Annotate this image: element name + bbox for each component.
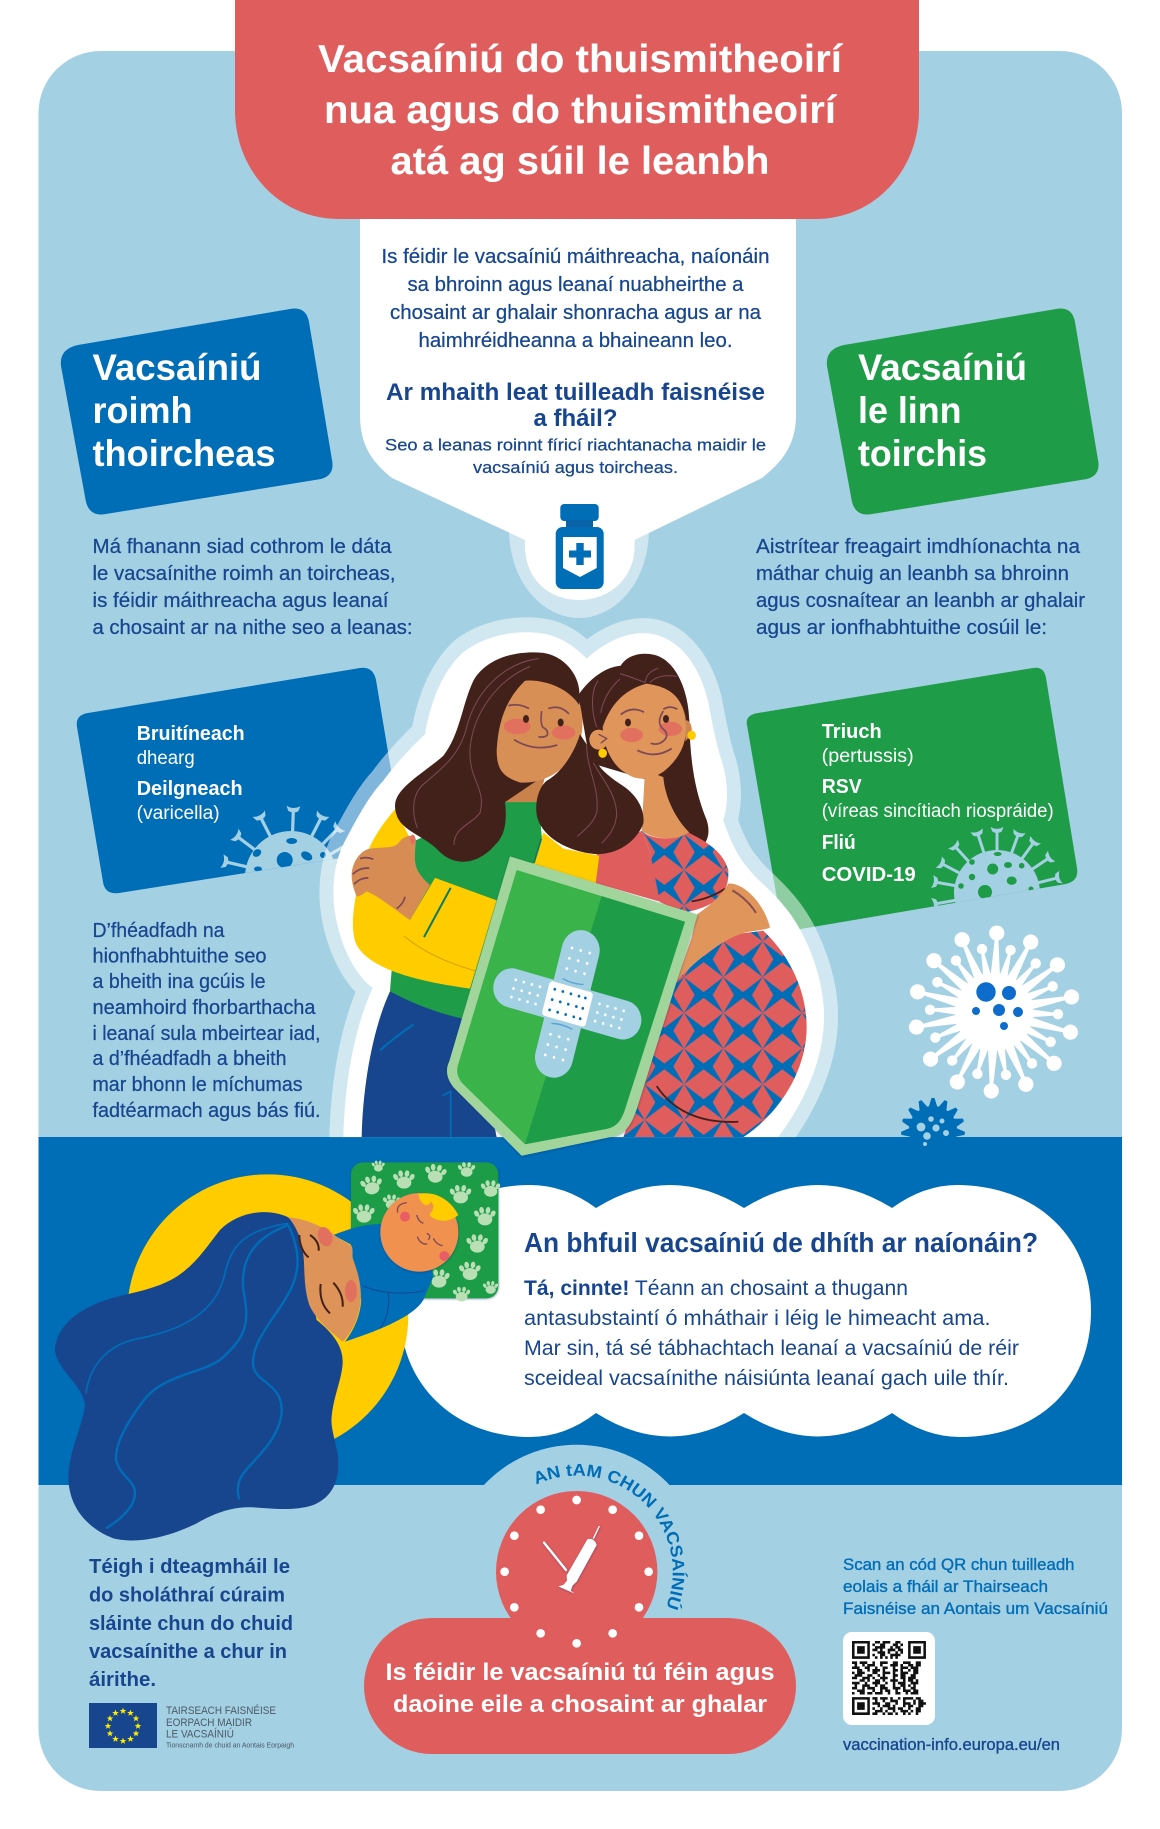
question subtext: Seo a leanas roinnt fíricí riachtanacha maidir le xyxy=(385,436,766,454)
illustration: mother with baby xyxy=(55,1160,501,1540)
question heading: Ar mhaith leat tuilleadh faisnéise xyxy=(386,379,765,406)
figure halo xyxy=(333,632,824,1137)
text: contact healthcare provider: sláinte chun do chuid xyxy=(89,1613,293,1635)
intro paragraph: Is féidir le vacsaíniú máithreacha, naíonáin xyxy=(382,245,770,268)
disease list xyxy=(822,720,1054,886)
shield with plaster xyxy=(447,856,698,1156)
disease list: RSV xyxy=(822,775,862,798)
baby pillow xyxy=(351,1162,498,1298)
clock hands: syringe xyxy=(544,1526,599,1594)
text: during pregnancy intro: máthar chuig an leanbh sa bhroinn xyxy=(756,563,1069,585)
icon: virus xyxy=(220,806,346,873)
right woman: back hair xyxy=(578,654,708,843)
hair strands xyxy=(86,1223,298,1528)
text: contact healthcare provider: áirithe. xyxy=(89,1669,156,1691)
heading: during pregnancy: le linn xyxy=(858,390,962,431)
text: birth defects warning xyxy=(92,920,320,1122)
text: scan QR prompt: Faisnéise an Aontais um Vacsaíniú xyxy=(843,1600,1108,1618)
text: scan QR prompt xyxy=(843,1556,1108,1618)
illustration: two women hugging xyxy=(333,632,824,1156)
text: contact healthcare provider xyxy=(89,1556,293,1691)
text: birth defects warning: neamhoird fhorbarthacha xyxy=(92,997,316,1019)
heading: during pregnancy: Vacsaíniú xyxy=(858,347,1027,388)
closing message: daoine eile a chosaint ar ghalar xyxy=(393,1691,767,1718)
text: contact healthcare provider: do sholáthraí cúraim xyxy=(89,1584,285,1606)
pillow paw prints xyxy=(352,1160,501,1301)
disease list: Bruitíneach xyxy=(137,722,245,745)
panel: during pregnancy heading card xyxy=(827,309,1099,514)
icon: white virus xyxy=(908,925,1080,1099)
left woman: jeans xyxy=(362,991,497,1137)
yellow circle xyxy=(127,1174,408,1456)
text: before pregnancy intro: le vacsaínithe roimh an toircheas, xyxy=(92,563,396,585)
heading: before pregnancy xyxy=(92,347,276,474)
text: EU portal name: EORPACH MAIDIR xyxy=(166,1717,252,1729)
baby's head xyxy=(380,1193,458,1272)
left woman: hair xyxy=(395,652,580,862)
vial halo xyxy=(509,528,649,618)
title banner xyxy=(235,0,919,219)
question heading: a fháil? xyxy=(534,405,618,432)
text: before pregnancy intro: a chosaint ar na nithe seo a leanas: xyxy=(92,617,412,639)
panel: diseases during pregnancy xyxy=(747,668,1077,936)
icon: vaccine vial xyxy=(556,504,604,589)
intro paragraph xyxy=(382,245,770,352)
curved text: time to vaccinate: AN tAM CHUN VACSAÍNIÚ xyxy=(536,1464,688,1610)
icon: small blue virus xyxy=(901,1098,965,1162)
heading: before pregnancy: Vacsaíniú xyxy=(92,347,262,388)
question subtext xyxy=(385,436,766,477)
clock face xyxy=(364,1491,796,1754)
text: EU portal name xyxy=(166,1704,294,1750)
logo: EU flag xyxy=(89,1703,157,1748)
text: birth defects warning: a bheith ina gcúis le xyxy=(92,971,266,993)
closing message pill xyxy=(364,1618,796,1754)
closing message: Is féidir le vacsaíniú tú féin agus xyxy=(386,1659,774,1686)
intro paragraph: haimhréidheanna a bhaineann leo. xyxy=(418,329,732,352)
left woman: hand xyxy=(352,836,430,920)
right woman: belly xyxy=(623,931,807,1137)
band: infants section background xyxy=(38,1137,1122,1485)
right woman: face xyxy=(603,684,686,779)
disease list: (víreas sincítiach riospráide) xyxy=(822,801,1054,822)
mother's face xyxy=(288,1217,361,1342)
right woman: chest xyxy=(642,770,689,838)
text: birth defects warning: D’fhéadfadh na xyxy=(92,920,225,942)
closing message xyxy=(386,1659,774,1718)
right woman: front hair lock xyxy=(536,734,644,854)
right woman: hand on belly xyxy=(677,884,770,981)
panel: diseases before pregnancy xyxy=(76,668,391,894)
heading: before pregnancy: roimh xyxy=(92,390,192,431)
text: scan QR prompt: eolais a fháil ar Thairseach xyxy=(843,1578,1048,1596)
icon: virus xyxy=(930,827,1062,906)
figure white outline xyxy=(333,632,824,1137)
question subtext: vacsaíniú agus toircheas. xyxy=(473,458,678,477)
intro callout panel xyxy=(360,200,796,600)
title: Vacsaíniú do thuismitheoirí xyxy=(318,38,843,81)
text: scan QR prompt: Scan an cód QR chun tuilleadh xyxy=(843,1556,1074,1574)
panel: before pregnancy heading card xyxy=(61,309,333,514)
intro paragraph: chosaint ar ghalair shonracha agus ar na xyxy=(390,301,762,324)
right woman: patterned top xyxy=(642,831,728,913)
disease list: COVID-19 xyxy=(822,863,916,886)
text: portal URL: vaccination-info.europa.eu/en xyxy=(843,1736,1060,1754)
infants paragraph: antasubstaintí ó mháthair i léig le himeacht ama. xyxy=(524,1307,990,1330)
infants paragraph: sceideal vacsaínithe náisiúnta leanaí gach uile thír. xyxy=(524,1367,1009,1390)
disease list: (varicella) xyxy=(137,803,220,824)
infants paragraph: Mar sin, tá sé tábhachtach leanaí a vacsaíniú de réir xyxy=(524,1337,1019,1360)
text: birth defects warning: mar bhonn le míchumas xyxy=(92,1074,302,1096)
disease list: dhearg xyxy=(137,748,195,769)
text: during pregnancy intro: agus cosnaítear an leanbh ar ghalair xyxy=(756,590,1085,612)
text: EU portal name: Tionscnamh de chuid an Aontais Eorpaigh xyxy=(166,1740,294,1750)
left woman: neck xyxy=(505,777,545,802)
left woman: torso xyxy=(390,800,545,1020)
title: nua agus do thuismitheoirí xyxy=(324,89,837,132)
panel: infants vaccination cloud xyxy=(400,1185,1091,1437)
infants paragraph: Tá, cinnte! Téann an chosaint a thugann xyxy=(524,1277,908,1300)
text: EU portal name: TAIRSEACH FAISNÉISE xyxy=(166,1704,276,1717)
question heading xyxy=(386,379,765,432)
infants paragraph xyxy=(524,1277,1019,1390)
disease list: (pertussis) xyxy=(822,746,914,767)
text: during pregnancy intro xyxy=(756,536,1085,639)
plaster xyxy=(476,910,659,1098)
QR code xyxy=(843,1632,935,1725)
text: birth defects warning: a d’fhéadfadh a bheith xyxy=(92,1048,286,1070)
text: EU portal name: LE VACSAÍNIÚ xyxy=(166,1728,234,1740)
text: before pregnancy intro xyxy=(92,536,412,639)
text: during pregnancy intro: Aistrítear freagairt imdhíonachta na xyxy=(756,536,1081,558)
right woman: cardigan xyxy=(593,831,662,902)
disease list: Deilgneach xyxy=(137,777,243,800)
heading: during pregnancy xyxy=(858,347,1027,474)
left woman: yellow shoulder and arm xyxy=(353,809,497,989)
disease list: Fliú xyxy=(822,831,856,854)
text: during pregnancy intro: agus ar ionfhabhtuithe cosúil le: xyxy=(756,617,1047,639)
text: birth defects warning: hionfhabhtuithe seo xyxy=(92,946,266,968)
text: before pregnancy intro: is féidir máithreacha agus leanaí xyxy=(92,590,389,612)
heading: infants: An bhfuil vacsaíniú de dhíth ar naíonáin? xyxy=(524,1227,1038,1258)
baby blanket xyxy=(333,1224,433,1342)
title xyxy=(318,38,843,183)
text: contact healthcare provider: vacsaínithe a chur in xyxy=(89,1641,287,1663)
left woman: face xyxy=(497,680,582,783)
mother's hair xyxy=(55,1212,343,1540)
heading: before pregnancy: thoircheas xyxy=(92,433,276,474)
disease list: Triuch xyxy=(822,720,882,743)
text: birth defects warning: i leanaí sula mbeirtear iad, xyxy=(92,1023,320,1045)
text: before pregnancy intro: Má fhanann siad cothrom le dáta xyxy=(92,536,392,558)
heading: during pregnancy: toirchis xyxy=(858,433,987,474)
title: atá ag súil le leanbh xyxy=(390,140,770,183)
text: birth defects warning: fadtéarmach agus bás fiú. xyxy=(92,1100,320,1122)
intro paragraph: sa bhroinn agus leanaí nuabheirthe a xyxy=(408,273,744,296)
text: contact healthcare provider: Téigh i dteagmháil le xyxy=(89,1556,290,1578)
clock dots xyxy=(500,1496,653,1648)
clock dome cut into band xyxy=(450,1445,704,1699)
disease list xyxy=(137,722,245,824)
